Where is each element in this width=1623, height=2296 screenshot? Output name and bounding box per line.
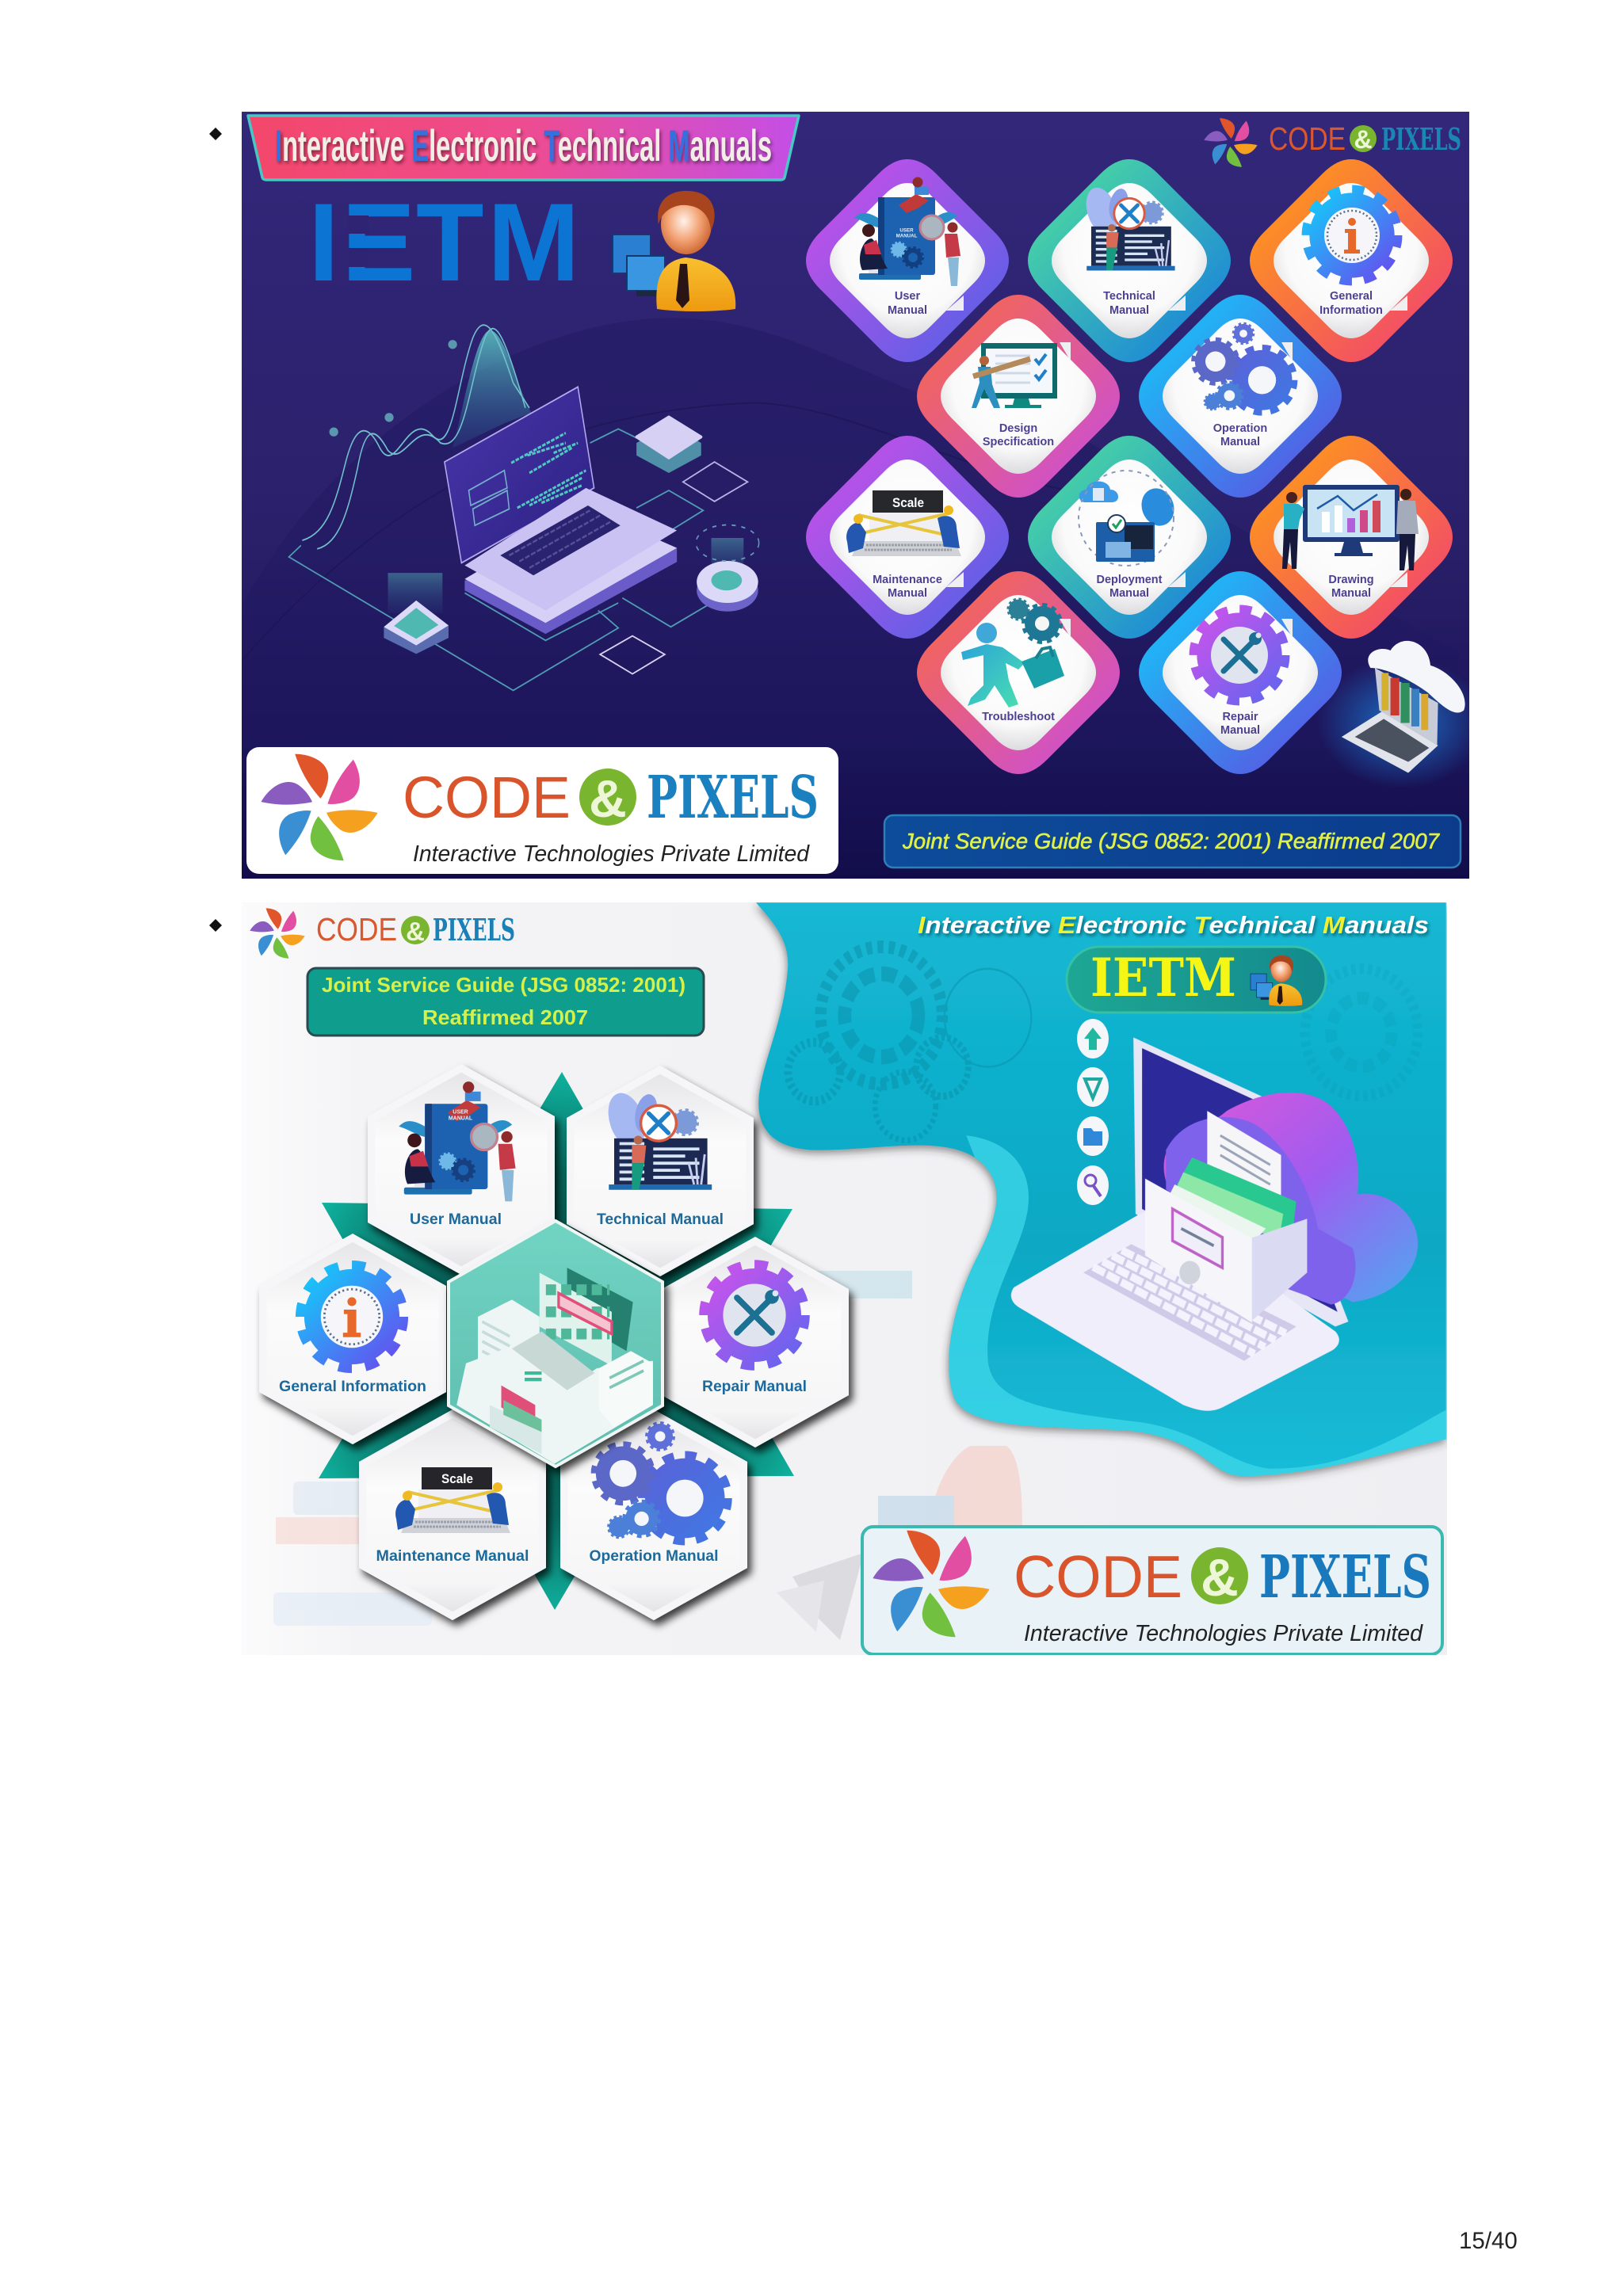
tile: Repair Manual <box>1139 571 1342 774</box>
tile: Drawing Manual <box>1250 436 1453 639</box>
tile: Operation Manual: Operation <box>1213 422 1267 435</box>
logo card: CODE <box>1014 1543 1182 1610</box>
tile: Deployment Manual: Deployment <box>1097 574 1163 586</box>
icon: cloud library laptop <box>1317 641 1486 788</box>
logo card: Interactive Technologies Private Limited <box>1024 1621 1423 1646</box>
tile: Technical Manual: Manual <box>1109 304 1149 317</box>
standard callout: Reaffirmed 2007 <box>422 1005 588 1029</box>
title ribbon: Interactive Electronic Technical Manuals <box>275 120 772 170</box>
page number: 15/40 <box>1459 2228 1518 2254</box>
tile: Repair Manual: Repair <box>1222 711 1258 723</box>
standard callout <box>884 815 1461 868</box>
laptop illustration <box>289 325 759 690</box>
tile: User Manual: USER <box>899 228 914 233</box>
hex: Operation Manual <box>560 1409 747 1620</box>
logo top left: & <box>406 917 425 946</box>
background swoosh <box>242 318 1062 661</box>
logo card: & <box>1201 1548 1239 1607</box>
tile: User Manual: Manual <box>888 304 927 317</box>
tile: Deployment Manual <box>1028 436 1231 639</box>
circuit lines <box>289 429 747 690</box>
tile: Design Specification: Design <box>999 422 1037 435</box>
hex: Repair Manual <box>662 1237 849 1447</box>
laptop base <box>464 548 677 634</box>
hex: Maintenance Manual: Scale <box>441 1471 473 1486</box>
laptop base <box>1011 1211 1339 1411</box>
title: Interactive Electronic Technical Manuals <box>918 911 1429 939</box>
center hex: file workstation <box>449 1221 663 1466</box>
tile: Maintenance Manual: Maintenance <box>873 574 942 586</box>
hex: User Manual: MANUAL <box>449 1116 473 1122</box>
wave chart <box>453 330 532 448</box>
hex: Operation Manual: Operation Manual <box>590 1548 718 1565</box>
tile: Maintenance Manual <box>806 436 1009 639</box>
tile: Troubleshoot <box>917 571 1120 774</box>
screen <box>1133 1037 1348 1326</box>
panel background <box>242 112 1469 879</box>
hex: General Information: General Information <box>279 1379 426 1395</box>
tile: User Manual: User <box>895 290 920 303</box>
hex: Technical Manual: Technical Manual <box>597 1211 724 1228</box>
hex: User Manual: USER <box>453 1109 468 1116</box>
panel: top IETM banner <box>206 112 1486 879</box>
tile: Design Specification <box>917 295 1120 498</box>
tile: Repair Manual: Manual <box>1220 724 1260 737</box>
tile: Technical Manual: Technical <box>1103 290 1155 303</box>
tile: Maintenance Manual: Manual <box>888 587 927 600</box>
tile: Technical Manual <box>1028 159 1231 362</box>
logo card: PIXELS <box>647 764 819 832</box>
standard callout: Joint Service Guide (JSG 0852: 2001) <box>322 973 685 997</box>
icon: person at computers <box>613 191 735 311</box>
cloud laptop illustration <box>1011 1037 1418 1411</box>
small logo top right: PIXELS <box>1381 121 1461 157</box>
tile: Drawing Manual: Manual <box>1331 587 1371 600</box>
laptop screen <box>445 387 594 563</box>
IETM heading: IETM <box>308 180 580 304</box>
hex: Maintenance Manual <box>359 1409 546 1620</box>
hex: Technical Manual <box>567 1066 754 1276</box>
logo top left: PIXELS <box>433 912 515 948</box>
logo card <box>246 747 838 874</box>
standard callout <box>307 968 704 1035</box>
logo card: Interactive Technologies Private Limited <box>413 841 810 867</box>
hex: Maintenance Manual: Maintenance Manual <box>376 1548 529 1565</box>
IETM pill <box>1067 947 1326 1013</box>
tile: General Information <box>1250 159 1453 362</box>
small logo top right: & <box>1354 125 1373 154</box>
panel: lower IETM banner <box>242 902 1447 1655</box>
hex: User Manual: User Manual <box>410 1211 502 1228</box>
cloud <box>1164 1093 1418 1302</box>
bullet 2 <box>209 919 222 932</box>
tile: General Information: Information <box>1319 304 1383 317</box>
logo top left: CODE <box>316 911 397 948</box>
logo card <box>862 1527 1442 1654</box>
box top right <box>636 441 701 473</box>
tile: Maintenance Manual: Scale <box>892 495 924 510</box>
ring right <box>712 538 743 564</box>
faint gears <box>789 947 1418 1140</box>
standard callout: Joint Service Guide (JSG 0852: 2001) Reaffirmed 2007 <box>902 829 1440 853</box>
IETM pill: IETM <box>1090 947 1236 1009</box>
tile: User Manual: MANUAL <box>896 233 918 239</box>
logo card: PIXELS <box>1259 1543 1431 1611</box>
side buttons <box>1077 1019 1109 1205</box>
logo top left <box>250 908 515 959</box>
IETM heading <box>315 204 572 280</box>
tile: User Manual <box>806 159 1009 362</box>
tile: Design Specification: Specification <box>983 436 1054 448</box>
hex: Repair Manual: Repair Manual <box>702 1379 807 1395</box>
tile: Troubleshoot: Troubleshoot <box>982 711 1055 723</box>
hex: User Manual <box>368 1064 555 1275</box>
logo card: & <box>589 769 627 828</box>
file drawer <box>1251 1219 1307 1322</box>
teal star behind hexagons <box>319 1072 794 1610</box>
tile: Drawing Manual: Drawing <box>1328 574 1374 586</box>
tile: Operation Manual <box>1139 295 1342 498</box>
tile: Operation Manual: Manual <box>1220 436 1260 448</box>
logo card: CODE <box>403 765 571 830</box>
small logo top right: CODE <box>1269 120 1346 157</box>
faint background objects <box>273 1271 1022 1640</box>
teal blob <box>756 902 1446 1476</box>
bullet 1 <box>209 128 222 140</box>
tile: General Information: General <box>1330 290 1373 303</box>
hex: General Information <box>259 1234 446 1444</box>
tile: Deployment Manual: Manual <box>1109 587 1149 600</box>
teal tile left <box>388 573 442 613</box>
small logo top right <box>1204 118 1461 167</box>
papers and folders <box>1207 1111 1281 1229</box>
panel background <box>242 902 1447 1655</box>
